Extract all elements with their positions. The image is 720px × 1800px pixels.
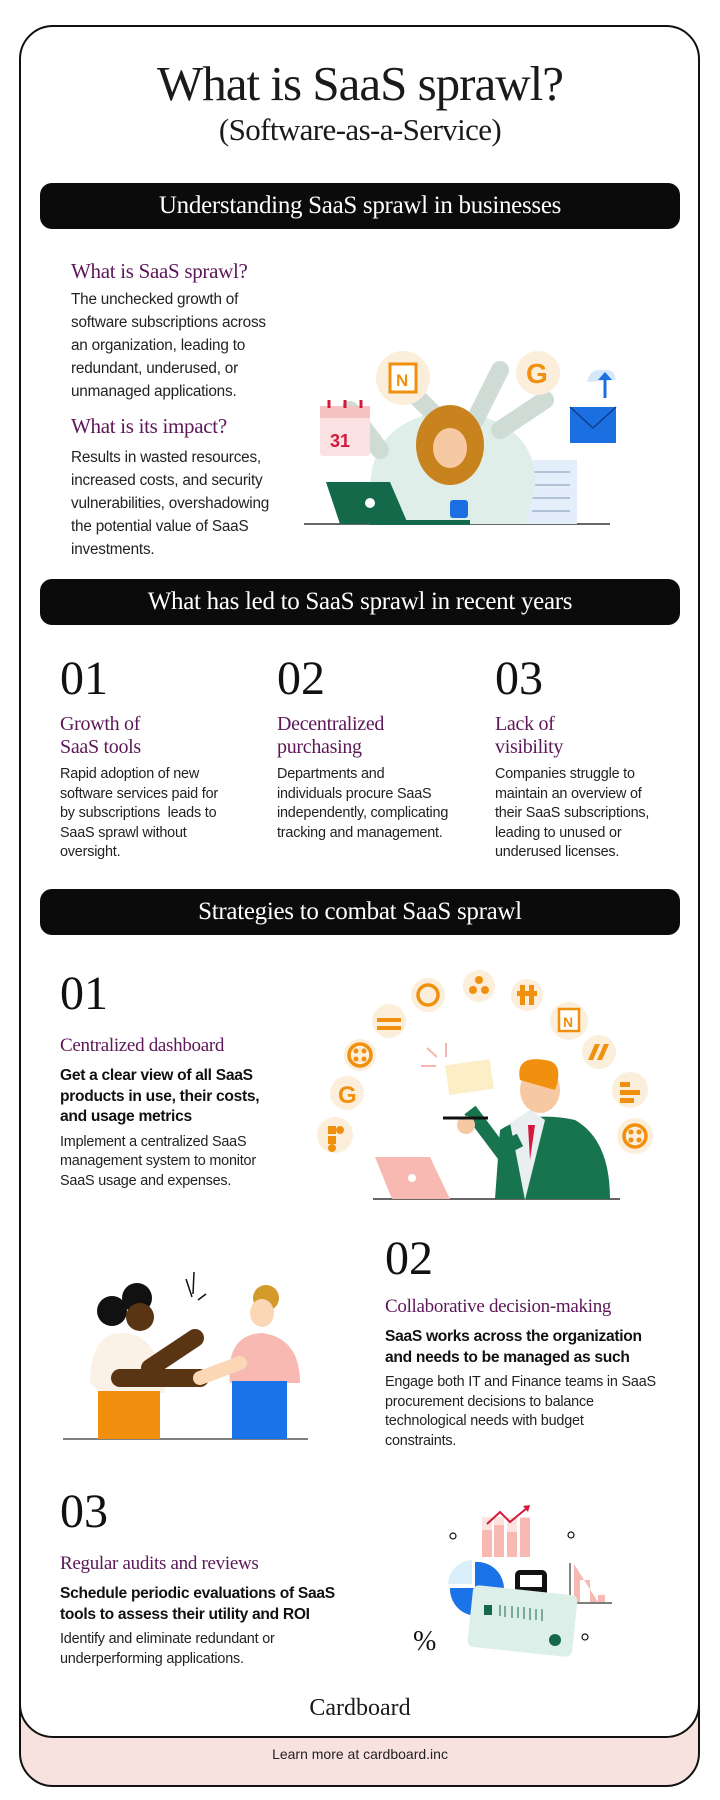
section bar: strategies: [40, 889, 680, 935]
cause 02: independently, complicating: [277, 805, 448, 821]
heading: impact: What is its impact?: [71, 414, 227, 438]
illustration: handshake: [63, 1272, 308, 1440]
text: impact: vulnerabilities, overshadowing: [71, 495, 269, 512]
cause 03: [495, 652, 649, 860]
text: impact: increased costs, and security: [71, 472, 262, 489]
text: impact: the potential value of SaaS: [71, 518, 248, 535]
pink footer strip: [19, 1600, 700, 1787]
title: What is SaaS sprawl?: [157, 56, 563, 111]
strategy 02 text: and needs to be managed as such: [385, 1348, 630, 1366]
illustration: multitasking woman: [304, 351, 616, 525]
cause 01: Growth of: [60, 713, 140, 735]
section bar: causes: [40, 579, 680, 625]
strategy 01 text: Centralized dashboard: [60, 1035, 224, 1056]
strategy 03 text: Regular audits and reviews: [60, 1553, 259, 1574]
cause 01: [60, 652, 218, 860]
strategy 01 text: products in use, their costs,: [60, 1088, 259, 1104]
strategy 02 text: Engage both IT and Finance teams in SaaS: [385, 1374, 656, 1390]
cause 01: SaaS tools: [60, 736, 141, 758]
text: definition: software subscriptions across: [71, 314, 266, 331]
illustration: audit charts: [413, 1505, 612, 1657]
strategy 02 text: technological needs with budget: [385, 1413, 584, 1429]
cause 03: underused licenses.: [495, 844, 619, 860]
strategy 01 text: Implement a centralized SaaS: [60, 1134, 246, 1150]
cause 03: leading to unused or: [495, 824, 621, 840]
cause 03: Companies struggle to: [495, 766, 635, 782]
cause 02: individuals procure SaaS: [277, 786, 431, 802]
cause 01: software services paid for: [60, 786, 218, 802]
text: definition: an organization, leading to: [71, 337, 245, 354]
cause 03: Lack of: [495, 713, 555, 735]
cause 02: [277, 652, 448, 840]
cause 03: their SaaS subscriptions,: [495, 805, 649, 821]
text: definition: redundant, underused, or: [71, 360, 238, 377]
text: impact: Results in wasted resources,: [71, 449, 261, 466]
strategy 03 text: Identify and eliminate redundant or: [60, 1631, 275, 1647]
strategy 02 text: [385, 1232, 656, 1448]
cause 02: Departments and: [277, 766, 384, 782]
heading: what is saas sprawl: What is SaaS sprawl?: [71, 259, 248, 283]
section bar: strategies: Strategies to combat SaaS sprawl: [198, 898, 522, 925]
brand: Cardboard: Cardboard: [309, 1695, 411, 1721]
strategy 03 text: [60, 1485, 335, 1666]
cause 01: SaaS sprawl without: [60, 824, 187, 840]
footer link text: Learn more at cardboard.inc: [272, 1746, 448, 1762]
strategy 01 text: management system to monitor: [60, 1153, 256, 1169]
strategy 01 text: 01: [60, 967, 108, 1020]
strategy 01 text: [60, 967, 259, 1188]
strategy 02 text: procurement decisions to balance: [385, 1394, 594, 1410]
subtitle: (Software-as-a-Service): [219, 112, 501, 147]
cause 01: Rapid adoption of new: [60, 766, 199, 782]
strategy 02 text: 02: [385, 1232, 433, 1285]
strategy 03 text: tools to assess their utility and ROI: [60, 1606, 310, 1622]
cause 03: 03: [495, 652, 543, 705]
strategy 01 text: Get a clear view of all SaaS: [60, 1067, 253, 1084]
text: definition: [71, 291, 266, 400]
cause 02: tracking and management.: [277, 824, 443, 840]
illustration: multitasking woman: G: [526, 358, 548, 389]
section bar: understanding: [40, 183, 680, 229]
illustration: dashboard man with app icons: G: [338, 1082, 357, 1109]
cause 02: Decentralized: [277, 713, 384, 735]
strategy 02 text: constraints.: [385, 1432, 456, 1448]
section bar: understanding: Understanding SaaS sprawl in businesses: [159, 192, 561, 219]
cause 01: by subscriptions leads to: [60, 805, 216, 821]
cause 01: oversight.: [60, 844, 120, 860]
cause 02: 02: [277, 652, 325, 705]
text: impact: [71, 449, 269, 558]
illustration: dashboard man with app icons: [317, 970, 653, 1200]
cause 03: maintain an overview of: [495, 786, 642, 802]
strategy 01 text: and usage metrics: [60, 1108, 192, 1125]
illustration: audit charts: %: [413, 1626, 436, 1657]
strategy 03 text: 03: [60, 1485, 108, 1538]
cause 01: 01: [60, 652, 108, 705]
strategy 01 text: SaaS usage and expenses.: [60, 1172, 231, 1188]
strategy 03 text: underperforming applications.: [60, 1650, 244, 1666]
text: definition: unmanaged applications.: [71, 383, 236, 400]
strategy 02 text: Collaborative decision-making: [385, 1296, 611, 1317]
illustration: dashboard man with app icons: N: [563, 1014, 573, 1030]
section bar: causes: What has led to SaaS sprawl in recent years: [148, 588, 572, 615]
strategy 03 text: Schedule periodic evaluations of SaaS: [60, 1585, 335, 1602]
illustration: multitasking woman: N: [396, 371, 408, 390]
cause 03: visibility: [495, 736, 563, 758]
text: impact: investments.: [71, 541, 154, 558]
illustration: multitasking woman: 31: [330, 431, 350, 451]
strategy 02 text: SaaS works across the organization: [385, 1328, 642, 1345]
text: definition: The unchecked growth of: [71, 291, 238, 308]
cause 02: purchasing: [277, 736, 362, 758]
